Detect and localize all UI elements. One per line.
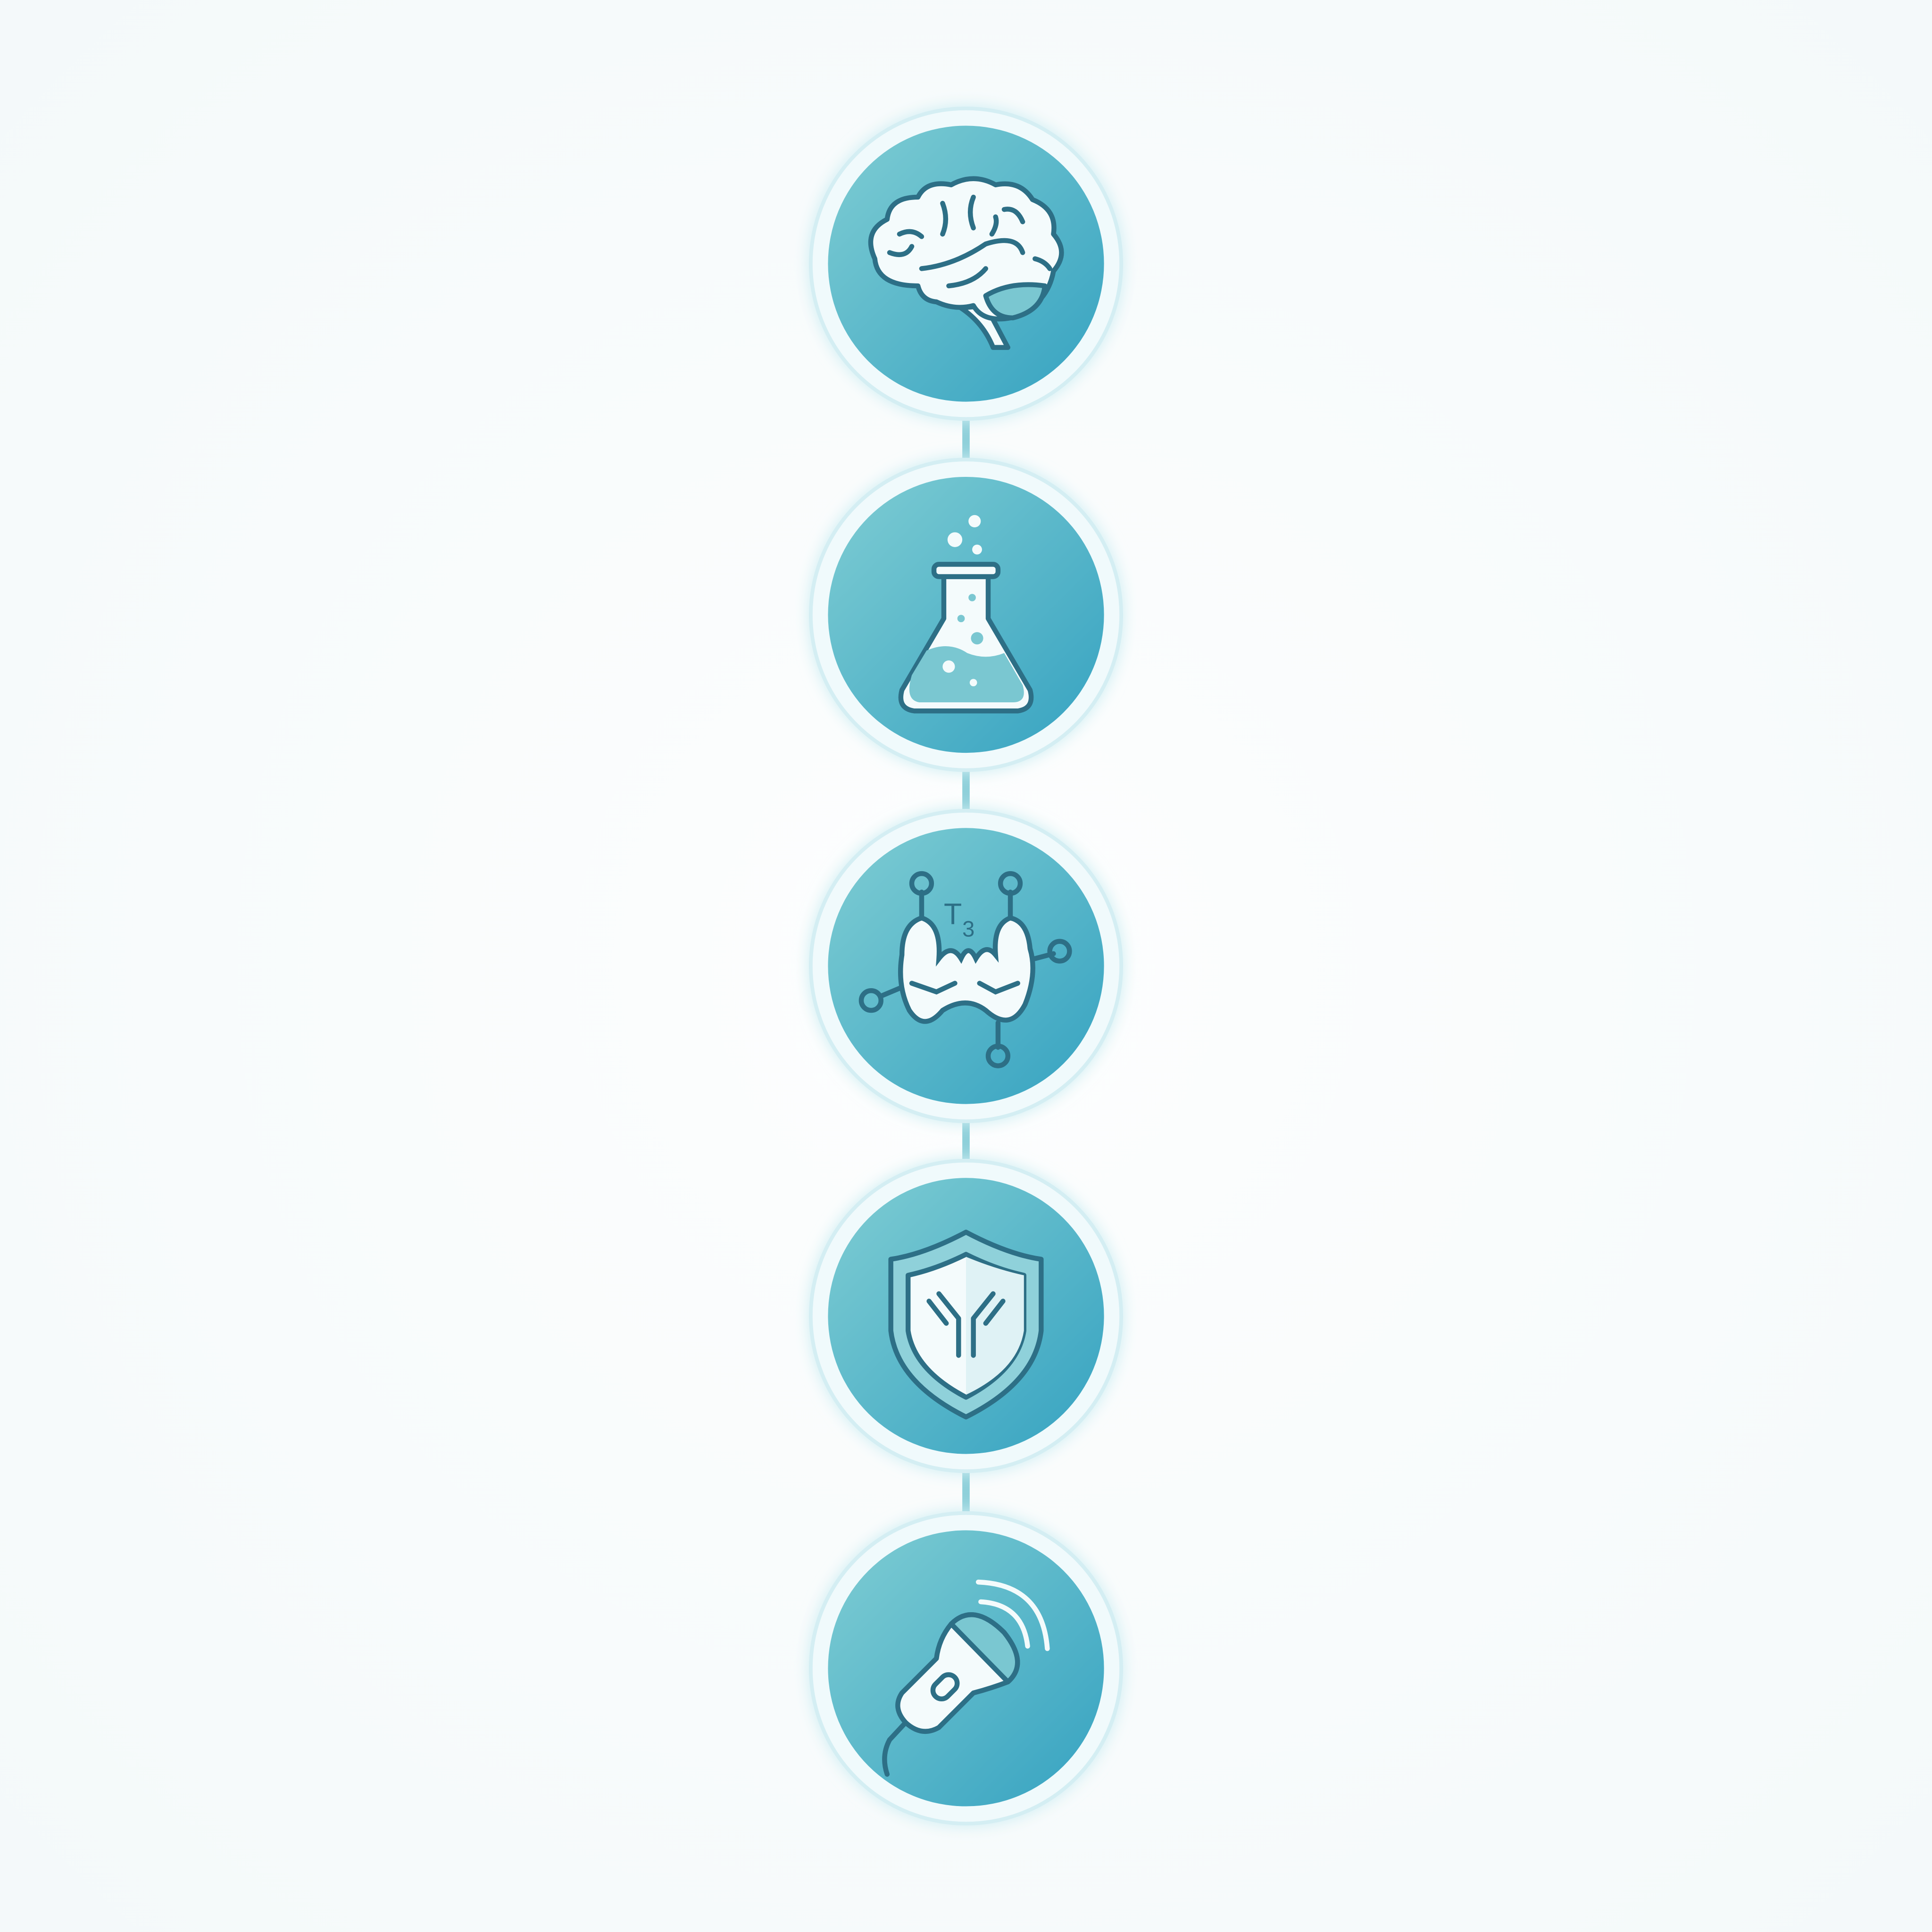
step 4: shield circle — [808, 1158, 1124, 1474]
icon: thyroid molecule: T — [944, 898, 962, 931]
icon: flask — [901, 515, 1031, 711]
step 5: ultrasound circle — [808, 1511, 1124, 1826]
icon: ultrasound probe — [884, 1582, 1047, 1774]
step 2: flask circle — [808, 457, 1124, 773]
step 1: brain circle — [808, 106, 1124, 421]
icon: shield with antibody — [891, 1232, 1041, 1417]
icon: thyroid molecule: 3 — [962, 916, 974, 941]
step 3: thyroid circle — [808, 808, 1124, 1124]
icon: brain — [871, 179, 1061, 348]
connector lines — [965, 419, 967, 1513]
icon: thyroid molecule — [861, 874, 1069, 1066]
